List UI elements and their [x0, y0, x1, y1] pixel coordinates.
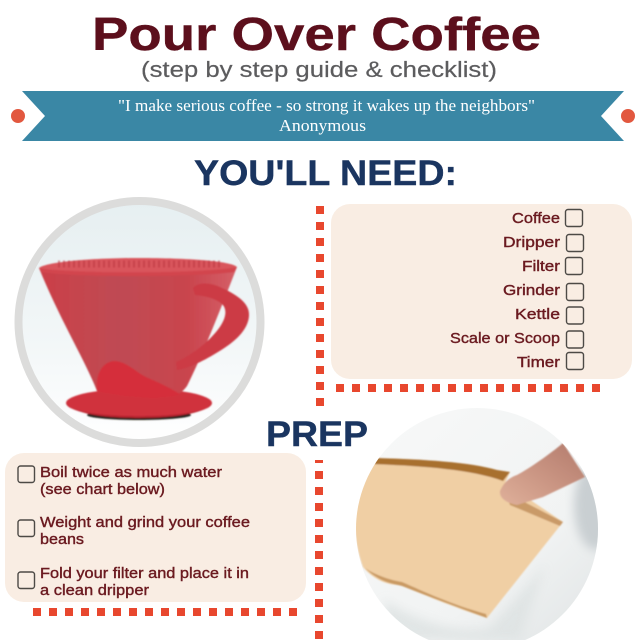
step: boil water	[18, 464, 222, 498]
item: dripper	[503, 234, 584, 252]
step: weigh and grind	[18, 514, 250, 548]
quote banner	[22, 91, 624, 141]
step: fold filter: a clean dripper	[40, 582, 149, 599]
banner dot right	[621, 109, 635, 123]
step: boil water: Boil twice as much water	[40, 464, 222, 481]
photo: folding paper filter	[356, 408, 598, 640]
item: scale or scoop: Scale or Scoop	[450, 330, 560, 347]
quote banner: Anonymous	[279, 116, 366, 135]
item: grinder	[503, 282, 584, 300]
item: grinder: Grinder	[503, 282, 560, 299]
step: boil water: (see chart below)	[40, 481, 165, 498]
item: kettle	[515, 306, 584, 324]
item: filter: Filter	[522, 258, 560, 275]
dotted divider: you'll need horizontal	[336, 384, 600, 392]
item: kettle: Kettle	[515, 306, 560, 323]
item: dripper: Dripper	[503, 234, 560, 251]
item: coffee: Coffee	[512, 210, 560, 227]
item: timer	[517, 352, 584, 371]
dotted divider: prep vertical	[315, 460, 323, 639]
heading: you'll need: YOU'LL NEED:	[194, 154, 457, 193]
dotted divider: you'll need vertical	[316, 206, 324, 406]
title: Pour Over Coffee	[92, 8, 541, 60]
heading: prep: PREP	[266, 415, 368, 454]
step: weigh and grind: Weight and grind your coffee	[40, 514, 250, 531]
step: fold filter	[18, 565, 249, 599]
photo: red coffee dripper	[18, 201, 260, 443]
item: coffee	[512, 210, 582, 227]
step: fold filter: Fold your filter and place it in	[40, 565, 249, 582]
banner dot left	[11, 109, 25, 123]
dotted divider: prep horizontal	[33, 608, 297, 616]
step: weigh and grind: beans	[40, 531, 84, 548]
panel: prep checklist	[5, 453, 306, 602]
subtitle: (step by step guide & checklist)	[141, 57, 497, 82]
quote banner: "I make serious coffee - so strong it wakes up the neighbors"	[118, 96, 535, 115]
item: timer: Timer	[517, 354, 560, 371]
panel: equipment checklist	[331, 204, 632, 379]
item: filter	[522, 258, 582, 275]
